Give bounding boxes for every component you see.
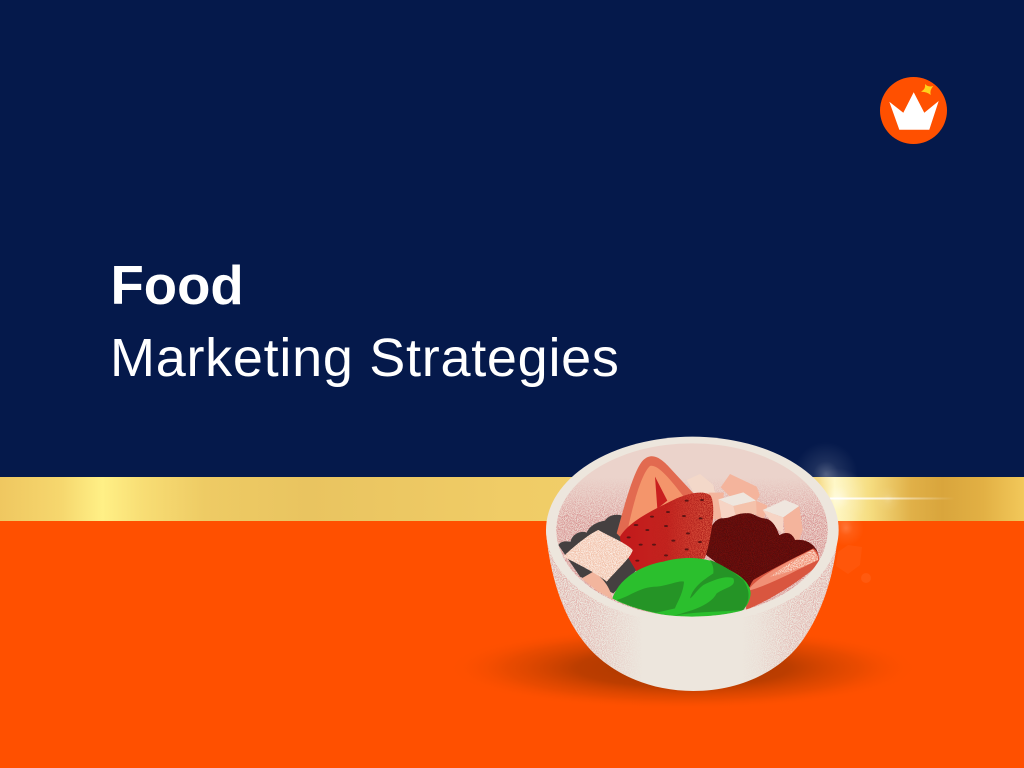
bowl shadow bbox=[447, 626, 919, 710]
orange background panel bbox=[0, 521, 1024, 768]
icon: crown logo bbox=[880, 77, 947, 144]
bowl rim bbox=[546, 437, 839, 623]
navy background panel bbox=[0, 0, 1024, 477]
tofu cubes bbox=[687, 474, 803, 543]
bowl contents bbox=[558, 456, 819, 618]
pale food piece bbox=[563, 530, 633, 599]
dark scalloped food bbox=[558, 515, 637, 593]
gold band bbox=[0, 477, 1024, 521]
subheading: Marketing Strategies: Marketing Strategies bbox=[110, 328, 620, 388]
dark red food bbox=[706, 513, 818, 587]
bowl interior bbox=[556, 443, 828, 617]
strawberry bbox=[617, 456, 713, 572]
light flare bbox=[794, 442, 955, 583]
bowl body bbox=[546, 530, 838, 691]
heading: Food: Food bbox=[110, 255, 244, 316]
salmon slice bbox=[746, 548, 819, 610]
food bowl illustration bbox=[546, 437, 839, 691]
green leaf bbox=[612, 558, 751, 618]
title bbox=[110, 255, 620, 388]
strawberry seeds bbox=[627, 499, 704, 562]
